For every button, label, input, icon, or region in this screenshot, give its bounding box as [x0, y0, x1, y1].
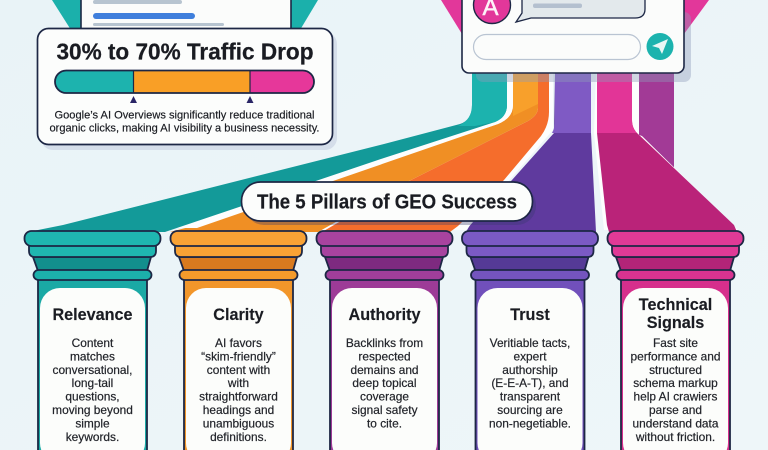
pillar: Trust: transparent: [500, 390, 561, 404]
pillar: Authority: signal safety: [351, 403, 418, 417]
pillar: Technical Signals: [608, 231, 744, 450]
stat description: [50, 110, 320, 134]
document illustration: [81, 0, 291, 30]
pillar: Relevance: [24, 231, 160, 450]
pillar: Technical Signals: Technical: [639, 296, 712, 314]
pillar: Technical Signals: Signals: [647, 314, 704, 332]
pillar: Authority: Backlinks from: [346, 336, 423, 350]
pillar: Trust: Veritiable tacts,: [490, 336, 570, 350]
pillar: Trust: expert: [513, 349, 547, 363]
teal shape behind document: [52, 0, 318, 30]
segmented traffic bar: [55, 70, 314, 93]
pillar: Clarity: AI favors: [215, 336, 262, 350]
pillar: Technical Signals: parse and: [649, 403, 702, 417]
pillar: Clarity: headings and: [203, 403, 274, 417]
ribbons connecting AI chat to pillars: [28, 73, 738, 232]
pink shape behind chat window: [441, 0, 709, 34]
pillar: Clarity: unambiguous: [203, 416, 274, 430]
stat heading: 30% to 70% Traffic Drop: [56, 38, 314, 64]
pillar: Authority: Authority: [349, 306, 420, 324]
pillar: Technical Signals: understand data: [633, 416, 719, 430]
pillar: Relevance: simple: [75, 416, 110, 430]
pillar: Trust: [462, 231, 598, 450]
pillar: Technical Signals: without friction.: [635, 430, 715, 444]
pillar: Authority: [316, 231, 452, 450]
pillar: Relevance: conversational,: [53, 363, 132, 377]
icon: send button: [646, 33, 674, 60]
pillar: Authority: respected: [358, 349, 411, 363]
bar markers: [130, 96, 254, 103]
pillar: Clarity: content with: [207, 363, 270, 377]
stat card: traffic drop: [38, 28, 337, 150]
pillar: Relevance: Content: [72, 336, 114, 350]
heading pill: The 5 Pillars of GEO Success: The 5 Pillars of GEO Success: [257, 192, 517, 214]
pillar: Trust: non-negetiable.: [489, 416, 571, 430]
pillar: Relevance: matches: [70, 349, 115, 363]
pillar: Relevance: Relevance: [52, 306, 133, 324]
pillar: Relevance: long-tail: [72, 376, 113, 390]
pillar: Technical Signals: help AI crawiers: [634, 390, 718, 404]
pillar: Technical Signals: schema markup: [633, 376, 718, 390]
pillar: Clarity: Clarity: [213, 306, 264, 324]
pillar: Clarity: definitions.: [210, 430, 267, 444]
pillar: Authority: demains and: [350, 363, 419, 377]
icon: AI avatar: [474, 0, 510, 24]
pillar: Authority: deep topical: [352, 376, 417, 390]
pillar: Authority: coverage: [360, 390, 409, 404]
pillar: Trust: sourcing are: [497, 403, 563, 417]
pillar: Technical Signals: Fast site: [653, 336, 698, 350]
pillar: Clarity: [170, 231, 306, 450]
pillar: Clarity: with: [227, 376, 249, 390]
pillar: Relevance: questions,: [65, 390, 120, 404]
heading pill: The 5 Pillars of GEO Success: [242, 182, 536, 225]
pillar: Technical Signals: structured: [649, 363, 702, 377]
stat description: Google’s AI Overviews significantly reduce traditional: [54, 110, 314, 122]
pillar: Relevance: moving beyond: [52, 403, 133, 417]
stat description: organic clicks, making AI visibility a business necessity.: [50, 122, 320, 134]
pillar: Clarity: straightforward: [199, 390, 278, 404]
pillar: Relevance: keywords.: [66, 430, 119, 444]
chat bubble: [516, 0, 645, 22]
pillar: Trust: (E-E-A-T), and: [491, 376, 569, 390]
pillar: Authority: to cite.: [367, 416, 402, 430]
chat input field: [474, 34, 640, 60]
AI chat window: [462, 0, 691, 82]
pillar: Technical Signals: performance and: [631, 349, 720, 363]
pillar: Trust: authorship: [502, 363, 558, 377]
pillar: Trust: Trust: [510, 306, 550, 324]
pillar: Clarity: “skim-friendly”: [201, 349, 276, 363]
